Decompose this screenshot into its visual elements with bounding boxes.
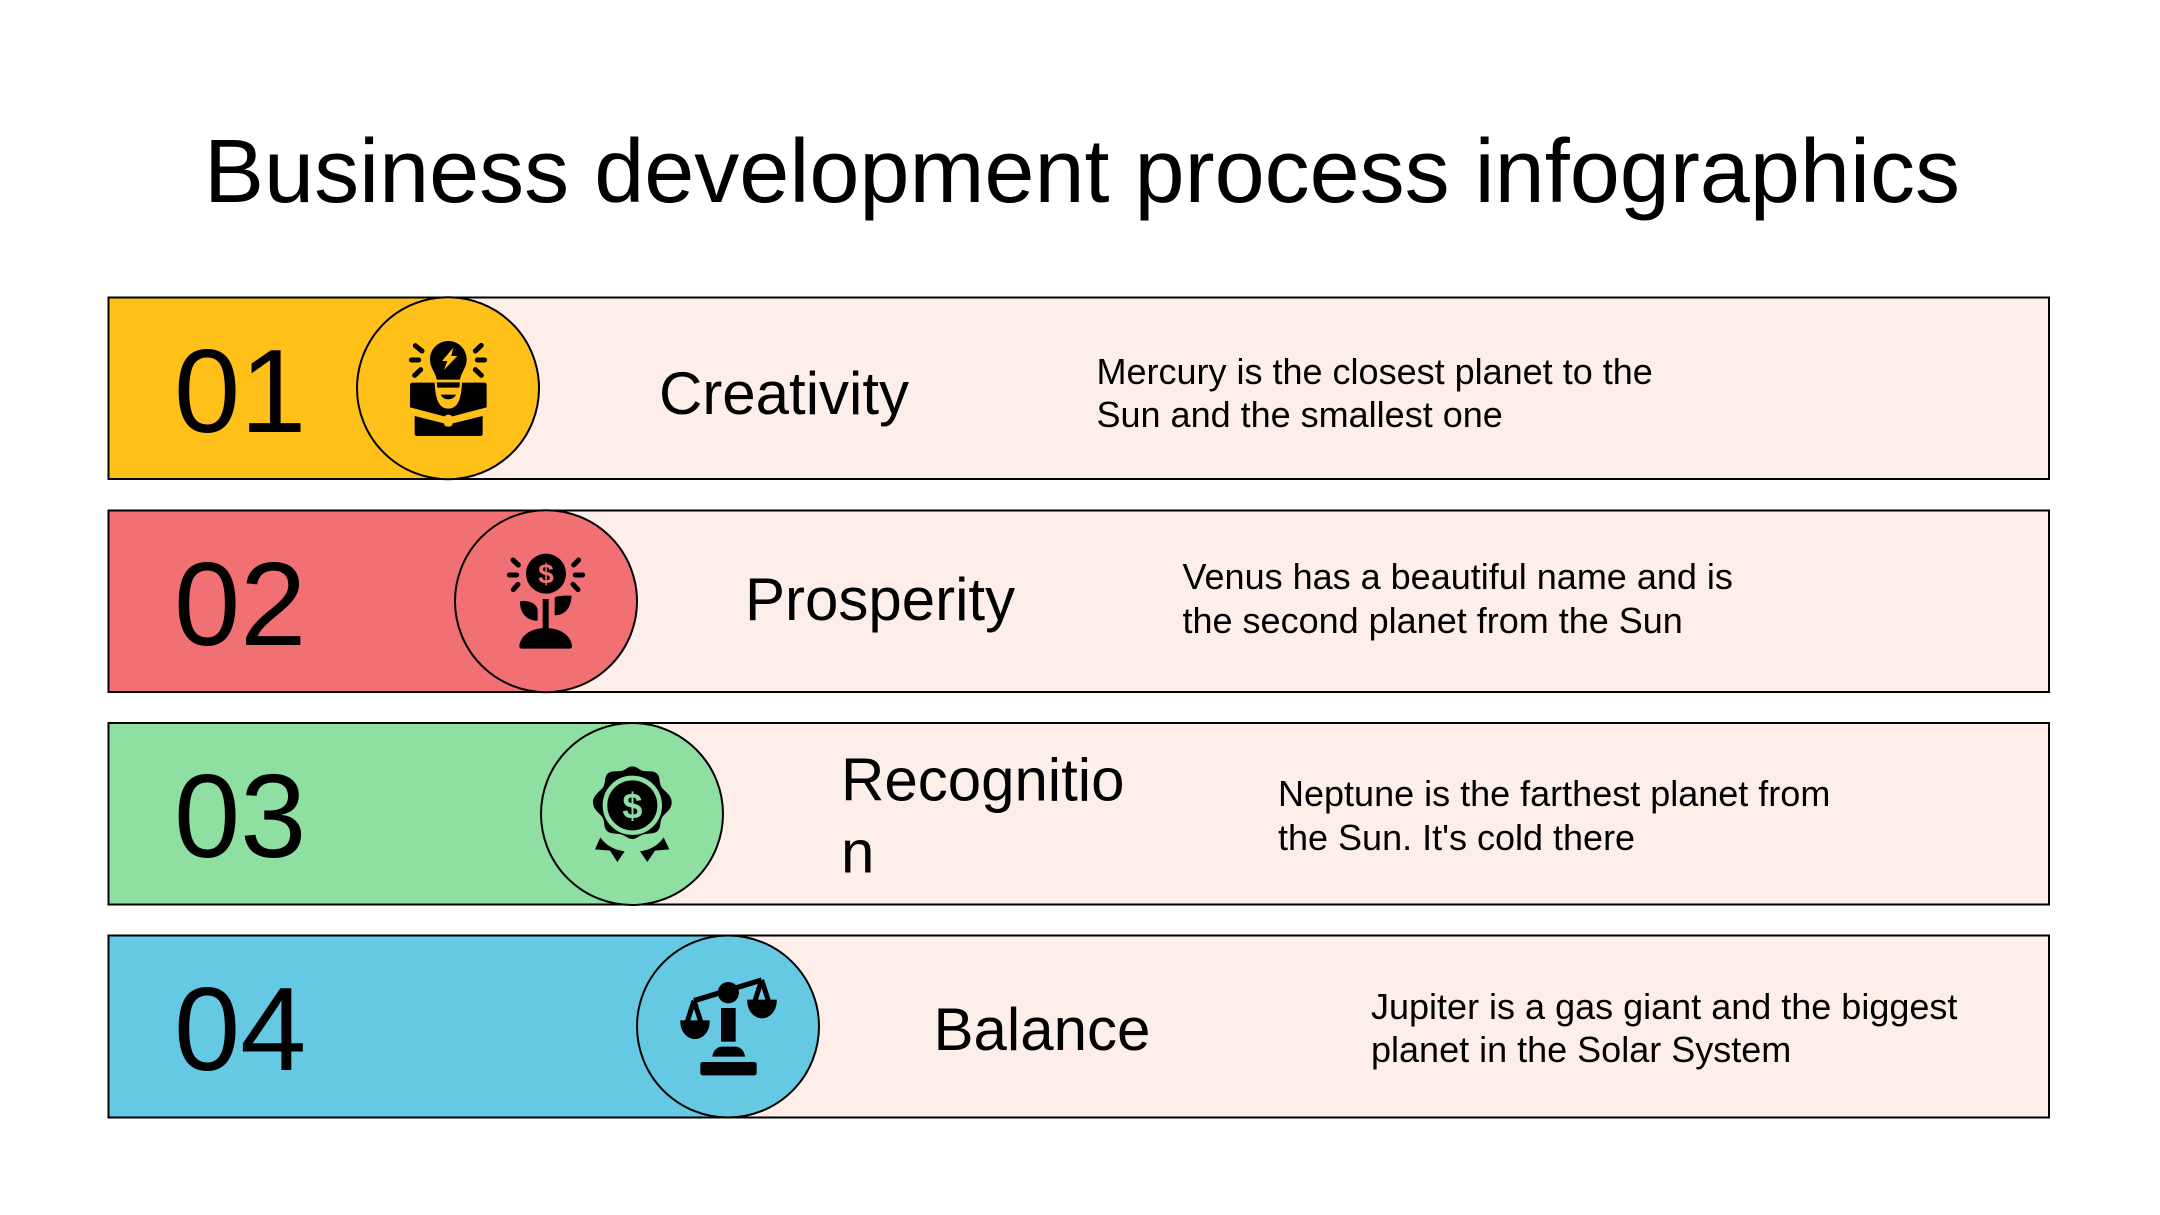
- colored band: [108, 723, 632, 904]
- label: n: [841, 818, 874, 886]
- label: Balance: [934, 996, 1150, 1063]
- icon circle: [637, 936, 819, 1118]
- icon: award badge: [593, 766, 672, 862]
- description: [1278, 773, 1830, 858]
- label: Creativity: [659, 360, 909, 427]
- panel: step 01 creativity: [108, 297, 2049, 479]
- row outline: [108, 510, 2049, 692]
- description: Neptune is the farthest planet from: [1278, 773, 1830, 814]
- colored band: [108, 510, 546, 692]
- number: 03: [174, 750, 306, 883]
- row background: [108, 510, 2049, 692]
- label: [841, 746, 1125, 886]
- row outline: [108, 298, 2049, 479]
- panel: step 04 balance: [108, 936, 2049, 1118]
- icon circle: [541, 723, 723, 905]
- row background: [108, 298, 2049, 479]
- panel: step 03 recognition: [108, 723, 2049, 905]
- description: [1096, 351, 1653, 435]
- icon circle: [455, 510, 637, 692]
- row background: [108, 936, 2049, 1118]
- title: Business development process infographics: [204, 122, 1960, 222]
- description: planet in the Solar System: [1371, 1029, 1791, 1070]
- icon: money plant: $: [538, 559, 554, 590]
- colored band: [108, 298, 448, 479]
- icon: balance scale: [680, 980, 777, 1075]
- icon: lightbulb briefcase: [410, 341, 487, 436]
- number: 02: [174, 538, 306, 671]
- description: Venus has a beautiful name and is: [1182, 556, 1733, 597]
- icon circle: [357, 297, 539, 479]
- label: Recognitio: [841, 746, 1125, 814]
- description: Jupiter is a gas giant and the biggest: [1371, 986, 1957, 1027]
- row outline: [108, 936, 2049, 1118]
- description: Mercury is the closest planet to the: [1096, 351, 1653, 392]
- row outline: [108, 723, 2049, 904]
- description: Sun and the smallest one: [1096, 394, 1503, 435]
- description: [1371, 986, 1957, 1070]
- colored band: [108, 936, 728, 1118]
- description: the Sun. It's cold there: [1278, 817, 1635, 858]
- label: Prosperity: [745, 566, 1015, 633]
- description: the second planet from the Sun: [1182, 600, 1683, 641]
- row background: [108, 723, 2049, 904]
- number: 01: [174, 325, 306, 458]
- icon: money plant: [509, 554, 583, 649]
- number: 04: [174, 963, 306, 1096]
- panel: step 02 prosperity: [108, 510, 2049, 692]
- description: [1182, 556, 1733, 641]
- icon: award badge: $: [622, 785, 642, 826]
